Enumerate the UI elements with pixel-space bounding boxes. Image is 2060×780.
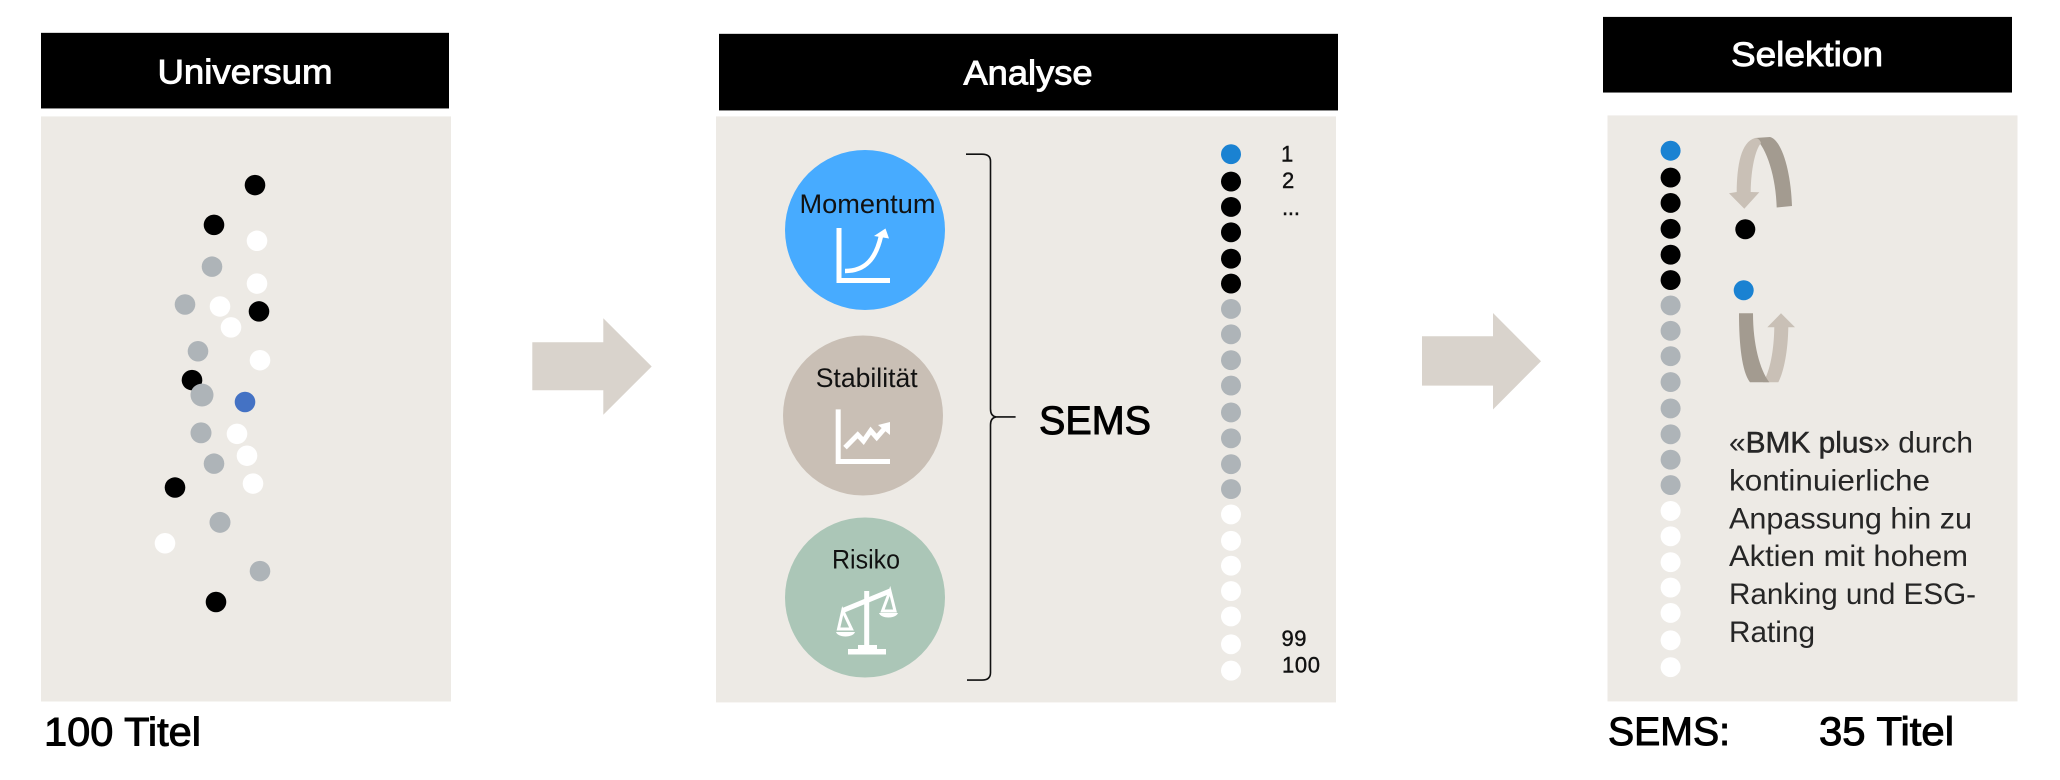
icon: zigzag rising chart [838, 409, 890, 462]
description text [1729, 427, 1976, 649]
label: SEMS: SEMS [1039, 399, 1151, 443]
ranked dot list [1661, 141, 1681, 677]
column: Analyse [716, 34, 1338, 702]
heading: Selektion [1603, 17, 2012, 93]
description text: Aktien mit hohem [1729, 540, 1968, 573]
dot: blue stock entering [1734, 280, 1754, 300]
heading: Universum [41, 33, 449, 108]
factor: Momentum [785, 150, 945, 310]
factor: Risiko [785, 518, 945, 678]
factor: Stabilität: Stabilität [816, 363, 918, 393]
panel: analysis background [716, 116, 1336, 702]
heading: Analyse [719, 34, 1338, 110]
dot: black stock leaving [1735, 219, 1755, 239]
rank numbers: 2 [1282, 168, 1294, 193]
description text: Anpassung hin zu [1729, 502, 1972, 535]
panel: selection background [1608, 115, 2018, 701]
panel: universe scatter of dots [41, 116, 451, 701]
factor: Risiko: Risiko [832, 545, 900, 575]
rank numbers: 99 [1281, 626, 1306, 651]
factor: Stabilität [783, 336, 943, 496]
column: Universum [41, 33, 451, 754]
rank numbers: 100 [1282, 653, 1320, 678]
brace grouping the three factors [966, 154, 1016, 680]
column: Selektion [1603, 17, 2018, 754]
caption: SEMS: SEMS: [1608, 710, 1730, 754]
caption: 100 Titel: 100 Titel [44, 710, 201, 754]
icon: curved arrow out (top) [1729, 137, 1792, 209]
caption: 35 Titel: 35 Titel [1819, 710, 1954, 754]
arrow: Universum to Analyse [532, 318, 652, 415]
description text: «BMK plus» durch [1729, 427, 1973, 460]
description text: Rating [1729, 616, 1815, 649]
heading: Universum: Universum [158, 54, 332, 92]
heading: Analyse: Analyse [963, 55, 1092, 93]
description text: kontinuierliche [1729, 465, 1930, 498]
arrow: Analyse to Selektion [1422, 313, 1541, 410]
factor: Momentum: Momentum [800, 189, 936, 219]
ranked dot list [1221, 144, 1241, 681]
rank numbers: ... [1282, 195, 1300, 220]
rank numbers: 1 [1281, 142, 1293, 167]
icon: exponential curve chart [839, 228, 890, 280]
description text: Ranking und ESG- [1729, 578, 1976, 611]
icon: curved arrow in (bottom) [1739, 313, 1795, 382]
rank numbers [1281, 142, 1320, 678]
heading: Selektion: Selektion [1731, 36, 1883, 74]
icon: balance scale [836, 591, 898, 654]
